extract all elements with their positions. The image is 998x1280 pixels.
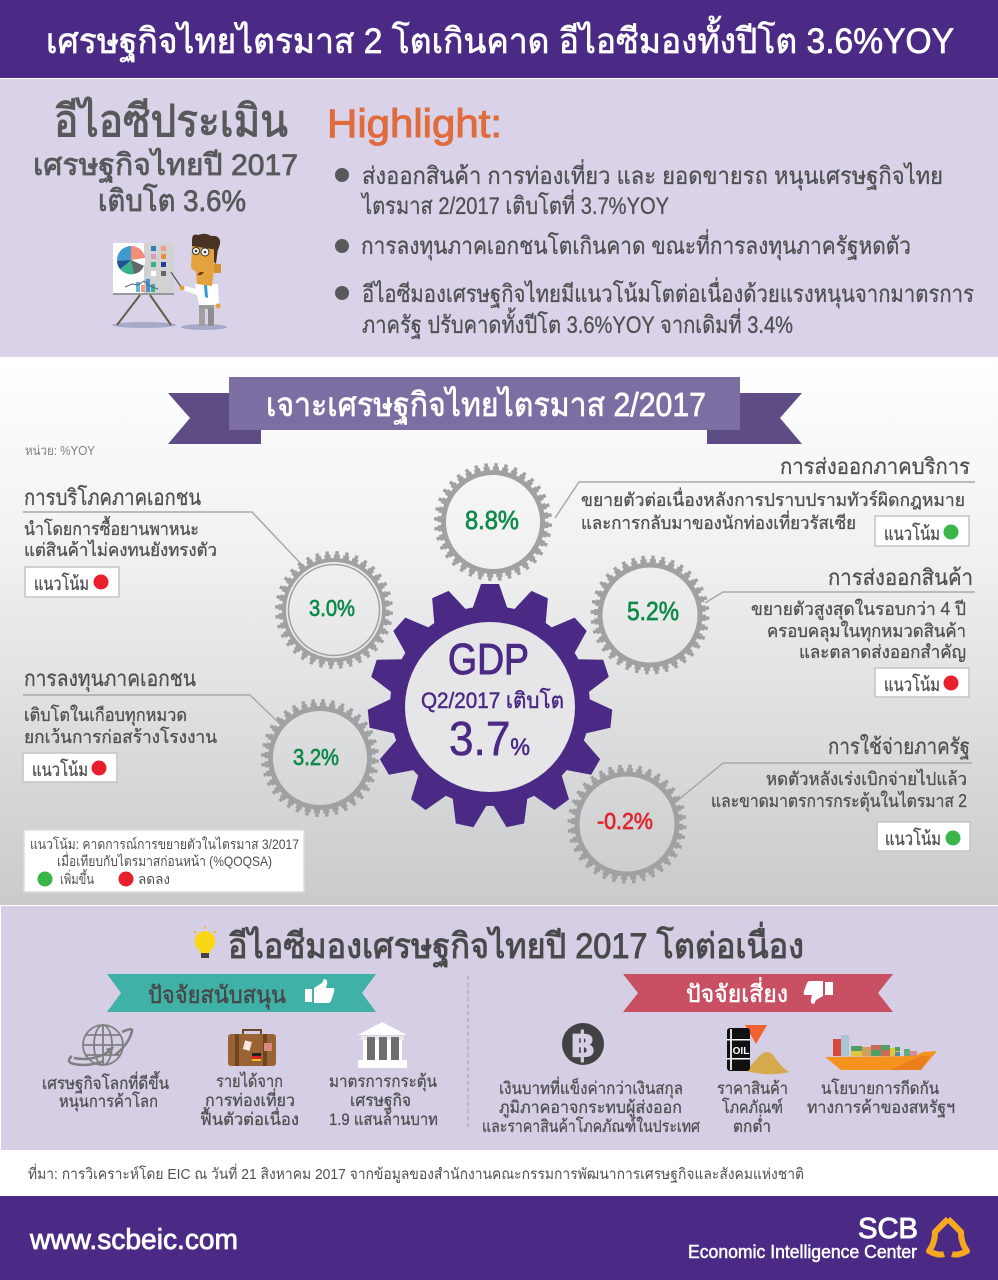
callout: goods exports: การส่งออกสินค้า [828,565,973,590]
callout: goods exports: และตลาดส่งออกสำคัญ [799,642,966,662]
item: US protectionism: นโยบายการกีดกัน [821,1078,939,1098]
icon: thumbs down [804,981,833,1004]
legend: แนวโน้ม: คาดการณ์การขยายตัวในไตรมาส 3/2017 [30,836,299,852]
legend: เมื่อเทียบกับไตรมาสก่อนหน้า (%QOQSA) [57,852,272,869]
item: stimulus [329,1022,438,1129]
callout: private consumption: แนวโน้ม [34,572,89,595]
highlight bullet 3 [335,277,974,339]
heading: EIC assessment: อีไอซีประเมิน [54,96,288,146]
divider [467,976,469,1127]
item: strong baht: เงินบาทที่แข็งค่ากว่าเงินสกุล [499,1076,683,1099]
section heading ribbon: เจาะเศรษฐกิจไทยไตรมาส 2/2017 [266,386,706,425]
item: world economy: เศรษฐกิจโลกที่ดีขึ้น [42,1071,169,1094]
logo text: Economic Intelligence Center [688,1242,917,1262]
callout: government spending [677,734,972,851]
icon: oil barrel, grain and down arrow: OIL [733,1046,749,1057]
item: stimulus: มาตรการกระตุ้น [329,1072,437,1092]
callout: goods exports: ครอบคลุมในทุกหมวดสินค้า [767,620,966,642]
callout: private consumption: แต่สินค้าไม่คงทนยังทรงตัว [24,539,217,560]
ribbon: supporting factors [107,974,376,1012]
logo text: SCB [858,1213,918,1245]
central GDP gear: Q2/2017 เติบโต [421,688,564,713]
highlight bullet 1 [335,159,943,220]
central GDP gear [367,584,613,829]
item: US protectionism [807,1035,955,1118]
item: tourism income [200,1030,299,1129]
gear: private investment 3.2%: 3.2% [293,744,339,770]
callout: private investment: แนวโน้ม [32,758,88,781]
title banner [0,0,998,78]
title banner: เศรษฐกิจไทยไตรมาส 2 โตเกินคาด อีไอซีมองทั้งปีโต 3.6%YOY [46,15,954,62]
highlight bullet 1: ไตรมาส 2/2017 เติบโตที่ 3.7%YOY [360,189,669,220]
heading: EIC assessment: เติบโต 3.6% [98,183,246,218]
website: www.scbeic.com [29,1224,238,1256]
ribbon: supporting factors: ปัจจัยสนับสนุน [148,982,286,1010]
icon: suitcase [228,1030,276,1066]
icon: light bulb [194,926,216,958]
callout: private investment: เติบโตในเกือบทุกหมวด [24,704,187,726]
legend: ลดลง [138,871,170,887]
gear: government spending -0.2% [570,766,684,882]
callout: goods exports: ขยายตัวสูงสุดในรอบกว่า 4 ปี [751,598,966,620]
panel: EIC outlook [1,906,998,1150]
item: commodity prices: โภคภัณฑ์ [722,1097,783,1117]
callout: government spending: และขาดมาตรการกระตุ้นในไตรมาส 2 [711,790,967,812]
panel: EIC assessment and highlights [0,79,998,357]
legend [24,830,304,892]
item: commodity prices: ราคาสินค้า [717,1079,788,1098]
callout: service exports [555,454,975,546]
callout: service exports: ขยายตัวต่อเนื่องหลังการปราบปรามทัวร์ผิดกฎหมาย [581,487,965,510]
highlight bullet 2: การลงทุนภาคเอกชนโตเกินคาด ขณะที่การลงทุนภาครัฐหดตัว [361,229,911,261]
heading: Highlight: Highlight: [327,102,502,146]
ribbon: risk factors [623,974,893,1012]
gear: private investment 3.2% [263,701,377,815]
icon: bank building [358,1022,407,1068]
callout: private consumption: นำโดยการซื้อยานพาหนะ [24,516,199,539]
item: commodity prices: ตกต่ำ [733,1114,771,1136]
callout: service exports: แนวโน้ม [884,522,940,545]
section heading ribbon [168,377,802,444]
central GDP gear: 3.7% [449,713,530,766]
callout: government spending: แนวโน้ม [885,827,941,850]
item: world economy: หนุนการค้าโลก [59,1091,158,1112]
icon: thumbs up [305,979,334,1003]
callout: private consumption [23,485,303,597]
gear: goods exports 5.2%: 5.2% [627,596,679,626]
gear: government spending -0.2%: -0.2% [597,808,653,834]
footer [0,1196,998,1280]
gear: private consumption 3.0% [277,553,391,667]
callout: service exports: การส่งออกภาคบริการ [780,454,970,479]
callout: private investment: การลงทุนภาคเอกชน [24,666,196,692]
icon: baht coin [562,1023,604,1065]
gear: service exports 8.8% [436,465,550,579]
item: stimulus: เศรษฐกิจ [350,1091,411,1111]
highlight bullet 3: ภาครัฐ ปรับคาดทั้งปีโต 3.6%YOY จากเดิมที่ 3.4% [362,307,793,339]
callout: private investment [23,666,279,782]
item: stimulus: 1.9 แสนล้านบาท [329,1110,438,1129]
logo text [688,1213,918,1262]
heading: EIC assessment: เศรษฐกิจไทยปี 2017 [33,147,298,183]
item: tourism income: รายได้จาก [216,1071,283,1091]
item: tourism income: ฟื้นตัวต่อเนื่อง [200,1107,299,1129]
logo mark [929,1219,967,1255]
gear: goods exports 5.2% [592,558,708,672]
central GDP gear: GDP [448,635,529,684]
legend: เพิ่มขึ้น [60,869,94,887]
ribbon: risk factors: ปัจจัยเสี่ยง [686,977,788,1008]
unit note: หน่วย: %YOY [25,443,95,458]
callout: goods exports [705,565,975,697]
gear: service exports 8.8%: 8.8% [465,505,519,535]
item: strong baht [482,1023,700,1136]
callout: goods exports: แนวโน้ม [884,673,940,696]
highlight bullet 1: ส่งออกสินค้า การท่องเที่ยว และ ยอดขายรถ หนุนเศรษฐกิจไทย [362,159,943,191]
item: tourism income: การท่องเที่ยว [205,1088,295,1110]
item: commodity prices [717,1025,789,1136]
gear: private consumption 3.0%: 3.0% [309,595,355,621]
heading: outlook: อีไอซีมองเศรษฐกิจไทยปี 2017 โตต่อเนื่อง [228,922,804,967]
source note: ที่มา: การวิเคราะห์โดย EIC ณ วันที่ 21 สิงหาคม 2017 จากข้อมูลของสำนักงานคณะกรรมการพัฒนาการเศรษฐกิจและสังคมแห่งชาติ [28,1163,804,1183]
callout: government spending: การใช้จ่ายภาครัฐ [828,734,970,760]
item: world economy [42,1025,169,1112]
callout: private investment: ยกเว้นการก่อสร้างโรงงาน [24,726,217,747]
icon: container ship [825,1035,937,1070]
icon: globe [69,1025,132,1065]
callout: private consumption: การบริโภคภาคเอกชน [24,485,201,510]
item: US protectionism: ทางการค้าของสหรัฐฯ [807,1098,955,1118]
heading: EIC assessment [33,96,298,218]
item: strong baht: และราคาสินค้าโภคภัณฑ์ในประเทศ [482,1116,700,1136]
icon: baht coin: ฿ [570,1024,596,1065]
icon: presenter with chart board [112,234,227,330]
panel: GDP breakdown [0,358,998,905]
item: strong baht: ภูมิภาคอาจกระทบผู้ส่งออก [499,1098,682,1118]
callout: government spending: หดตัวหลังเร่งเบิกจ่ายไปแล้ว [766,768,967,789]
callout: service exports: และการกลับมาของนักท่องเที่ยวรัสเซีย [581,510,856,533]
